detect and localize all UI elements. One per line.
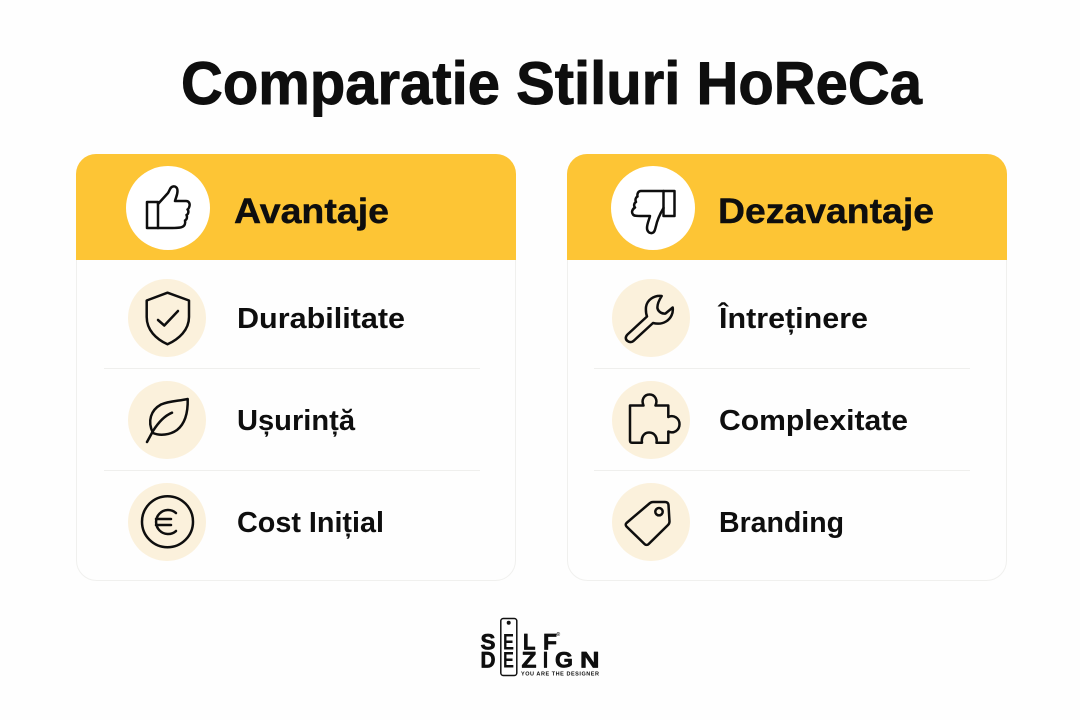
logo: self dezign: E (503, 630, 514, 654)
title: Comparatie Stiluri HoReCa (181, 50, 923, 117)
row: durabilitate: Durabilitate (237, 303, 405, 335)
logo: self dezign: S (480, 630, 496, 654)
row: intretinere (612, 279, 868, 357)
panel: avantaje (76, 154, 516, 580)
row: branding (612, 483, 844, 561)
logo: self dezign: E (503, 648, 514, 672)
panel header band (76, 154, 516, 260)
row: usurinta (128, 381, 356, 459)
panel background (568, 154, 1006, 580)
row: intretinere: Întreținere (717, 303, 868, 335)
logo: self dezign: N (580, 648, 600, 672)
icon: thumbs down (611, 166, 695, 250)
row: complexitate (612, 381, 908, 459)
row: complexitate: Complexitate (719, 405, 908, 437)
heading: dezavantaje: Dezavantaje (718, 192, 934, 231)
logo: self dezign: I (543, 648, 548, 672)
logo: self dezign: Z (522, 648, 536, 672)
row: cost initial (128, 483, 384, 561)
logo: self dezign: G (555, 648, 573, 672)
row: durabilitate (128, 279, 405, 357)
icon: thumbs up (126, 166, 210, 250)
logo: self dezign: L (523, 630, 536, 654)
logo: self dezign: ® (556, 631, 560, 638)
logo: self dezign: YOU ARE THE DESIGNER (521, 672, 599, 678)
row: usurinta: Ușurință (237, 405, 356, 437)
panel header band (567, 154, 1007, 260)
panel background (76, 154, 516, 580)
logo: self dezign (480, 618, 600, 678)
row: branding: Branding (719, 507, 844, 539)
row: cost initial: Cost Inițial (237, 507, 384, 539)
panel: dezavantaje (567, 154, 1007, 580)
logo: self dezign: F (543, 630, 557, 654)
heading: avantaje: Avantaje (234, 192, 389, 231)
logo: self dezign: D (480, 648, 496, 672)
